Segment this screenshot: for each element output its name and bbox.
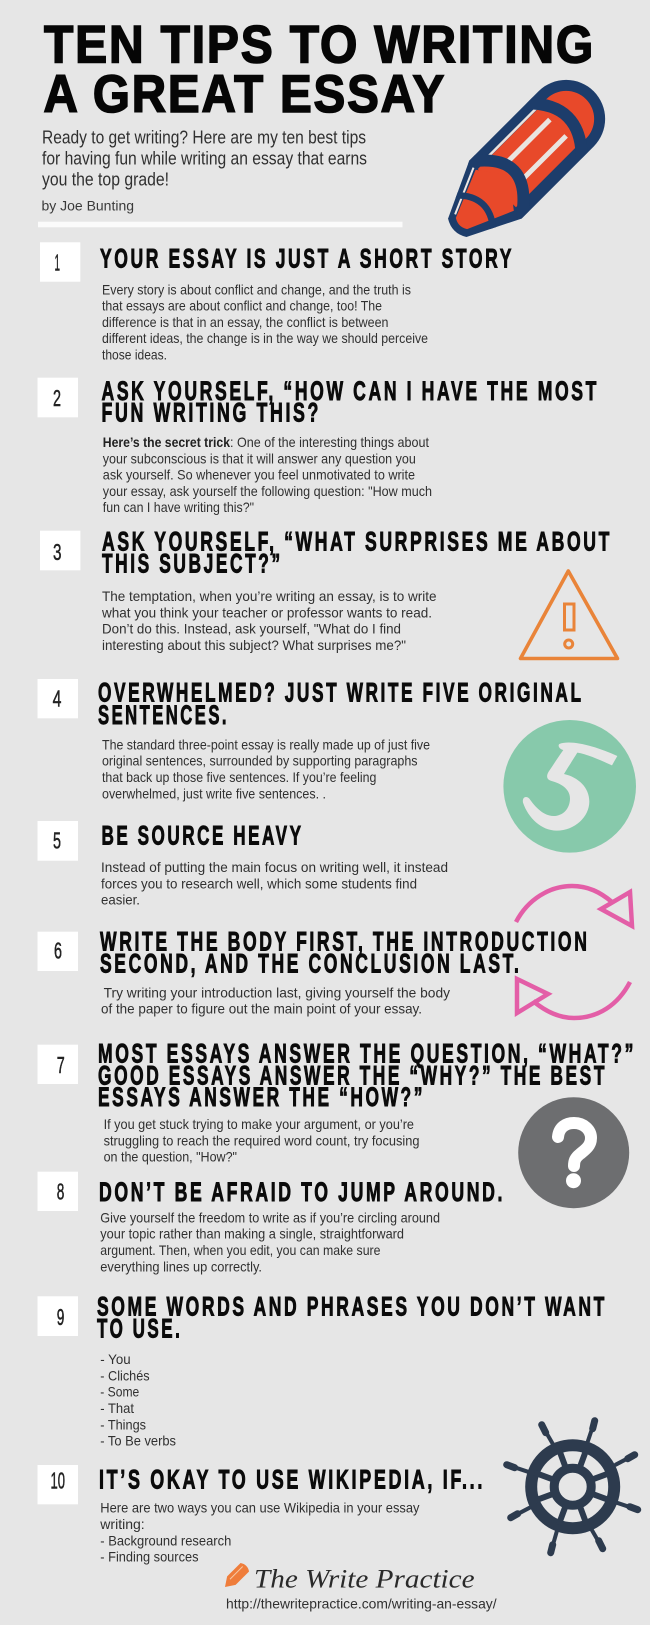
body 2: [103, 435, 432, 515]
body 2: your subconscious is that it will answer any question you: [103, 451, 416, 466]
body 6: Try writing your introduction last, giving yourself the body: [104, 985, 450, 1000]
body 5: [101, 860, 448, 908]
footer logo: The Write Practice: [221, 1562, 475, 1594]
body 9: list: - Things: [100, 1417, 146, 1432]
icon: ship wheel: [507, 1421, 638, 1553]
intro text: [42, 127, 367, 189]
body 1: [102, 282, 428, 362]
number badge 5: 5: [53, 827, 61, 853]
body 8: everything lines up correctly.: [100, 1259, 262, 1274]
source URL: http://thewritepractice.com/writing-an-essay/: [226, 1597, 497, 1612]
body 1: those ideas.: [102, 347, 167, 362]
number badge 4: 4: [53, 686, 62, 712]
number badge 4: [38, 679, 78, 718]
title: TEN TIPS TO WRITING: [44, 16, 595, 74]
body 4: The standard three-point essay is really made up of just five: [102, 737, 430, 752]
body 4: [102, 737, 430, 801]
number badge 3: 3: [53, 539, 62, 565]
number badge 1: 1: [54, 250, 60, 276]
body 8: your topic rather than making a single, straightforward: [100, 1227, 404, 1242]
panel: tip 1: [40, 242, 514, 362]
heading 6: [100, 927, 590, 979]
panel: tip 4: [38, 678, 636, 853]
number badge 2: [38, 378, 78, 417]
body 2: ask yourself. So whenever you feel unmotivated to write: [103, 468, 415, 483]
heading 7: ESSAYS ANSWER THE “HOW?”: [98, 1082, 425, 1112]
byline: by Joe Bunting: [42, 199, 134, 214]
body 3: The temptation, when you’re writing an essay, is to write: [102, 589, 436, 604]
number badge 9: 9: [57, 1304, 64, 1330]
number badge 2: 2: [53, 385, 61, 411]
body 9: list: [100, 1352, 176, 1449]
number badge 1: [40, 242, 80, 282]
body 5: easier.: [101, 893, 140, 908]
heading 4: [98, 678, 584, 730]
number badge 10: 10: [50, 1468, 65, 1494]
body 6: [101, 985, 450, 1017]
body 9: list: - To Be verbs: [100, 1434, 176, 1449]
number badge 7: 7: [57, 1052, 65, 1078]
panel: tip 6: [38, 927, 590, 1017]
number badge 5: [38, 821, 78, 861]
icon: small orange pencil: [221, 1562, 250, 1591]
body 1: difference is that in an essay, the conflict is between: [102, 315, 388, 330]
heading 3: [102, 527, 612, 579]
body 2: your essay, ask yourself the following question: "How much: [103, 484, 432, 499]
body 10: - Background research: [100, 1533, 231, 1548]
panel: tip 9: [38, 1292, 607, 1449]
icon: pink cycle arrows: [516, 886, 632, 1018]
body 9: list: - Some: [100, 1385, 139, 1400]
body 1: different ideas, the change is in the way we should perceive: [102, 331, 428, 346]
body 4: that back up those five sentences. If you’re feeling: [102, 770, 376, 785]
panel: tip 3: [40, 527, 618, 658]
header divider bar: [38, 222, 402, 227]
intro text: you the top grade!: [42, 169, 169, 189]
panel: tip 10: [38, 1421, 638, 1565]
icon: warning triangle: [520, 571, 618, 658]
body 3: interesting about this subject? What surprises me?": [102, 638, 406, 653]
body 1: that essays are about conflict and change, too! The: [102, 299, 382, 314]
heading 2: [102, 376, 599, 428]
body 8: argument. Then, when you edit, you can make sure: [100, 1243, 381, 1258]
body 8: [100, 1210, 440, 1274]
body 5: Instead of putting the main focus on writing well, it instead: [101, 860, 448, 875]
body 7: [104, 1117, 419, 1165]
body 4: overwhelmed, just write five sentences. .: [102, 786, 326, 801]
body 2: : One of the interesting things about: [230, 435, 429, 450]
body 9: list: - You: [100, 1352, 131, 1367]
body 7: on the question, "How?": [104, 1150, 237, 1165]
heading 5: BE SOURCE HEAVY: [102, 820, 304, 850]
heading 4: SENTENCES.: [98, 700, 229, 730]
body 2: fun can I have writing this?": [103, 500, 254, 515]
body 7: If you get stuck trying to make your argument, or you’re: [104, 1117, 414, 1132]
intro text: Ready to get writing? Here are my ten best tips: [42, 127, 366, 147]
body 2: Here’s the secret trick: [103, 435, 230, 450]
body 10: [99, 1501, 420, 1565]
heading 9: [97, 1292, 607, 1344]
body 9: list: - Clichés: [100, 1368, 150, 1383]
icon: question mark circle: [518, 1097, 629, 1208]
heading 3: THIS SUBJECT?”: [102, 549, 283, 579]
body 4: original sentences, surrounded by supporting paragraphs: [102, 754, 418, 769]
number badge 3: [40, 531, 80, 570]
body 9: list: - That: [100, 1401, 134, 1416]
body 10: writing:: [99, 1517, 145, 1532]
body 10: Here are two ways you can use Wikipedia in your essay: [100, 1501, 420, 1516]
body 3: [101, 589, 436, 653]
panel: tip 2: [38, 376, 599, 515]
body 1: Every story is about conflict and change, and the truth is: [102, 282, 411, 297]
number badge 8: [38, 1172, 78, 1211]
number badge 6: 6: [54, 937, 62, 963]
heading 9: TO USE.: [97, 1314, 182, 1344]
panel: tip 8: [38, 1172, 505, 1274]
logo wordmark: The Write Practice: [254, 1564, 475, 1594]
icon: green circle with 5: [503, 720, 636, 853]
body 10: - Finding sources: [100, 1550, 199, 1565]
number badge 10: [38, 1465, 78, 1504]
title: A GREAT ESSAY: [44, 65, 446, 124]
body 7: struggling to reach the required word count, try focusing: [104, 1133, 419, 1148]
body 3: what you think your teacher or professor wants to read.: [101, 605, 432, 620]
intro text: for having fun while writing an essay that earns: [42, 148, 367, 168]
number badge 7: [38, 1045, 78, 1084]
panel: tip 7: [38, 1038, 636, 1208]
number badge 8: 8: [57, 1178, 64, 1204]
title: [44, 16, 595, 124]
number badge 9: [38, 1296, 78, 1336]
heading 2: FUN WRITING THIS?: [102, 398, 321, 428]
number badge 6: [38, 932, 78, 971]
panel: tip 5: [38, 820, 448, 908]
body 8: Give yourself the freedom to write as if you’re circling around: [100, 1210, 440, 1225]
body 3: Don’t do this. Instead, ask yourself, "What do I find: [102, 622, 401, 637]
heading 7: [98, 1038, 636, 1112]
body 6: of the paper to figure out the main point of your essay.: [101, 1002, 422, 1017]
body 5: forces you to research well, which some students find: [101, 876, 417, 891]
icon: pencil: [448, 80, 606, 237]
